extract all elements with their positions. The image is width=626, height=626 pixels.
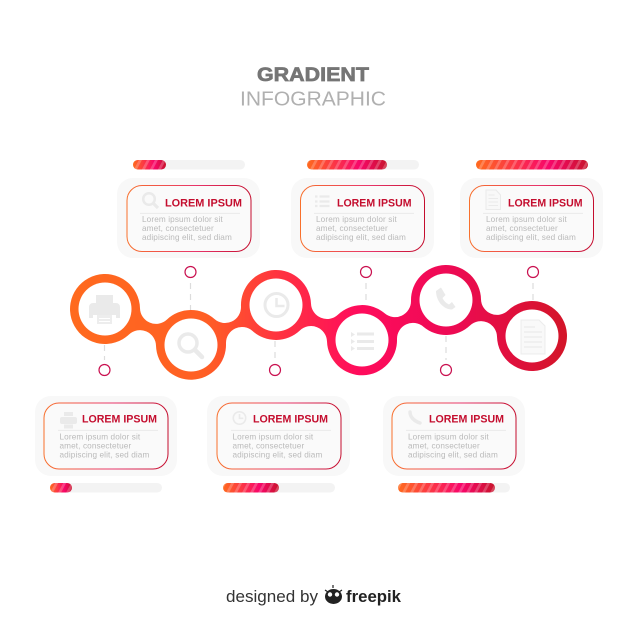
heading: LOREM IPSUM [82,414,157,426]
panel: list card [291,178,434,258]
connector: phone marker [440,336,452,376]
panel: search card [117,178,260,258]
connector: document marker [528,266,538,301]
title: INFOGRAPHIC [240,88,386,110]
text block: adipiscing elit, sed diam [142,233,232,242]
icon: printer [89,295,120,324]
text block: Lorem ipsum dolor sit [60,432,141,442]
text block: amet, consectetuer [486,224,558,233]
heading: LOREM IPSUM [337,198,412,210]
text block: adipiscing elit, sed diam [232,450,322,460]
heading: LOREM IPSUM [253,414,328,426]
progress bar: bottom 2 [223,483,335,492]
icon: document [486,190,500,210]
icon: search [143,193,158,208]
text block: Lorem ipsum dolor sit [408,432,489,442]
icon: list [315,196,330,206]
progress bar: top 1 [133,160,245,170]
panel: document card [460,178,603,258]
heading: LOREM IPSUM [508,198,582,210]
icon: freepik logo [325,585,342,604]
footer: designed by freepik: freepik [346,587,402,606]
progress bar: bottom 1 [50,483,162,492]
title: GRADIENT [257,64,369,86]
text block: amet, consectetuer [232,442,304,450]
text block: Lorem ipsum dolor sit [486,215,567,224]
timeline ribbon [70,265,567,380]
connector: list marker [360,266,372,305]
text block: amet, consectetuer [408,442,480,450]
text block: Lorem ipsum dolor sit [232,432,314,442]
footer: designed by freepik: designed by [226,588,319,606]
progress bar: top 2 [307,160,419,170]
text block: adipiscing elit, sed diam [486,233,576,242]
connector: search marker [185,266,196,310]
heading: LOREM IPSUM [429,414,504,426]
icon: clock [265,294,288,316]
heading: LOREM IPSUM [165,198,242,210]
icon: clock [233,412,246,424]
footer: designed by freepik [226,585,402,606]
text block: amet, consectetuer [142,224,214,233]
panel: phone card [383,396,525,476]
text block: Lorem ipsum dolor sit [316,215,397,224]
text block: adipiscing elit, sed diam [316,233,406,242]
panel: clock card [207,396,350,476]
text block: adipiscing elit, sed diam [60,450,149,460]
connector: printer marker [99,345,110,376]
text block: adipiscing elit, sed diam [408,450,498,460]
text block: amet, consectetuer [316,224,388,233]
connector: clock marker [270,341,280,376]
text block: amet, consectetuer [60,442,131,450]
icon: search [179,334,202,357]
title [240,64,386,110]
panel: printer card [35,396,177,476]
progress bar: bottom 3 [398,483,510,492]
icon: printer [60,412,77,428]
icon: list [351,332,374,351]
icon: document [521,320,545,354]
icon: phone [436,288,456,310]
text block: Lorem ipsum dolor sit [142,215,223,224]
icon: phone [410,412,420,423]
progress bar: top 3 [476,160,588,170]
